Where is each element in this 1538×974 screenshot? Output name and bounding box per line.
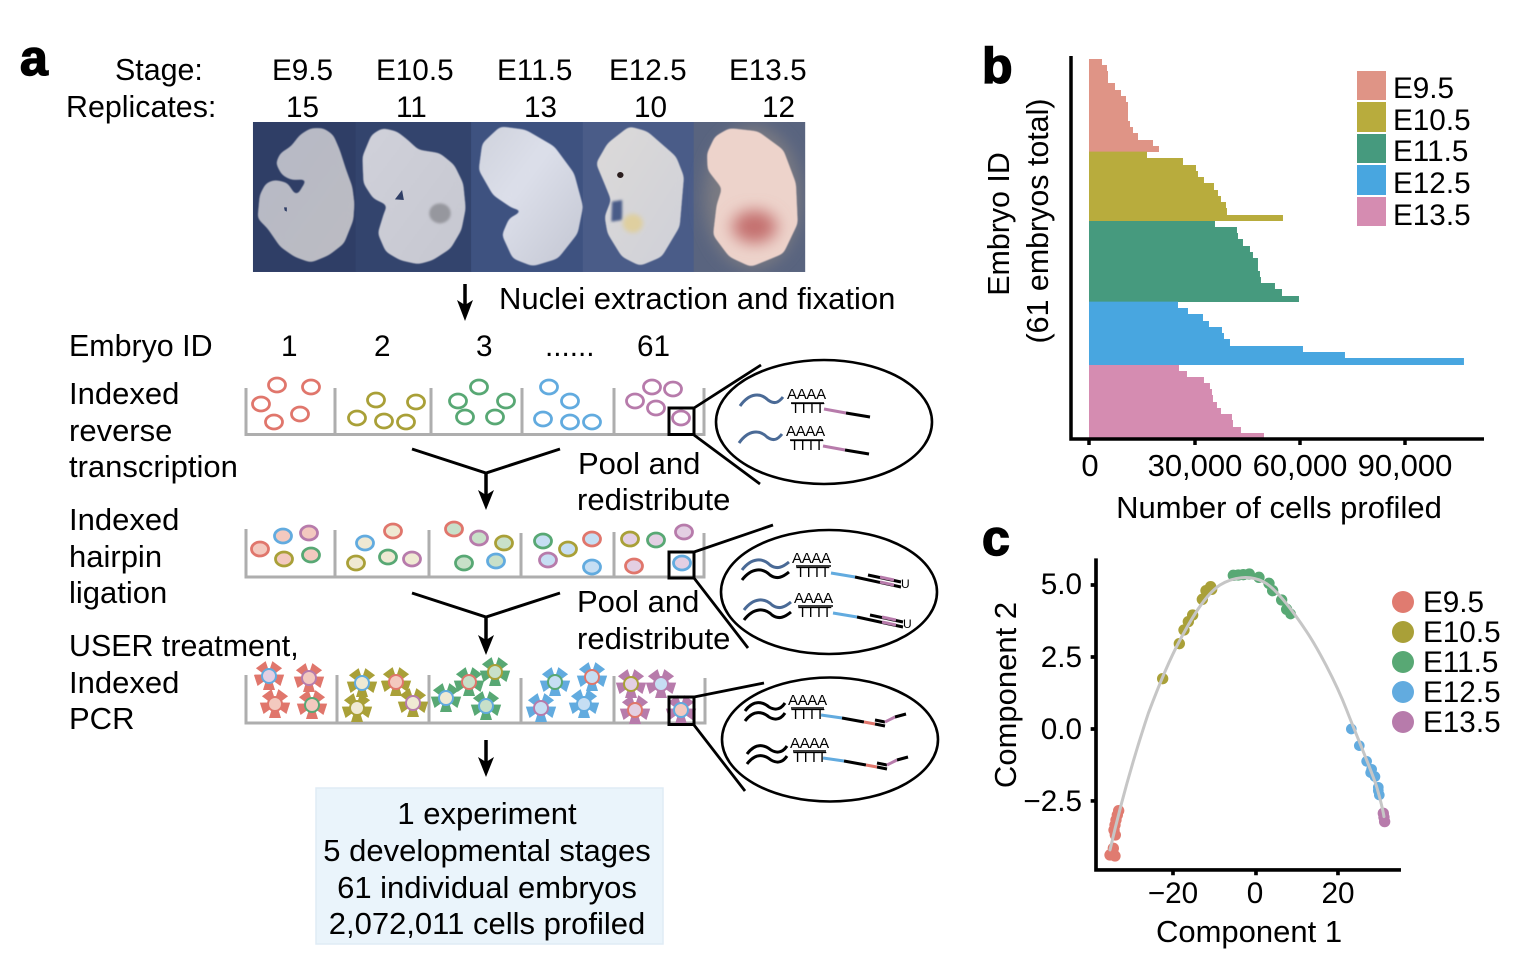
- panel c x-axis title: Component 1: [1156, 914, 1342, 949]
- step label: USER treatment, indexed PCR: Indexed: [69, 665, 179, 700]
- step label: indexed reverse transcription: reverse: [69, 413, 172, 448]
- callout: reverse transcription zoom: AAAA: [787, 386, 826, 403]
- plate: USER treatment PCR wells: [246, 657, 705, 724]
- panel b legend: [1357, 71, 1471, 232]
- panel c y tick labels: [1023, 568, 1082, 818]
- step label: USER treatment, indexed PCR: PCR: [69, 701, 134, 736]
- summary box: 2,072,011 cells profiled: [329, 906, 645, 941]
- points: E11.5: [1228, 568, 1296, 619]
- arrow: to summary: [478, 740, 494, 777]
- panel b legend: E9.5: [1393, 72, 1454, 105]
- panel b x tick labels: 30,000: [1148, 448, 1242, 483]
- replicates row: 10: [634, 91, 667, 124]
- callout: hairpin ligation zoom: TTTT: [798, 604, 831, 621]
- label: pool and redistribute 2: [577, 584, 730, 656]
- histogram bars: [1089, 59, 1464, 438]
- panel b x tick labels: 90,000: [1358, 448, 1452, 483]
- callout: hairpin ligation zoom: AAAA: [792, 550, 831, 567]
- stage row: E13.5: [729, 54, 807, 87]
- panel b x tick labels: 0: [1081, 448, 1099, 483]
- panel c x tick labels: 20: [1321, 877, 1355, 910]
- callout: PCR zoom: TTTT: [793, 749, 826, 766]
- panel c legend: E9.5: [1423, 586, 1484, 619]
- stage row: E12.5: [609, 54, 687, 87]
- step label: indexed hairpin ligation: [69, 502, 179, 610]
- label: pool and redistribute 2: redistribute: [577, 621, 730, 656]
- arrow: pool 1: [412, 449, 560, 510]
- replicates row: 13: [524, 91, 557, 124]
- callout: hairpin ligation zoom: TTTT: [796, 564, 829, 581]
- stage row: Stage:: [115, 53, 203, 87]
- replicates row: [66, 90, 795, 124]
- bars: E11.5: [1089, 221, 1299, 302]
- embryo ID row: 1: [281, 330, 298, 363]
- panel label b: b: [982, 38, 1013, 94]
- panel b legend: E13.5: [1393, 199, 1471, 232]
- panel c x tick labels: [1148, 877, 1355, 910]
- panel b x-axis title: Number of cells profiled: [1116, 490, 1442, 525]
- step label: indexed reverse transcription: [69, 376, 238, 484]
- summary box: 1 experiment: [397, 796, 577, 831]
- embryo ID row: [69, 329, 670, 363]
- plate: reverse transcription wells: [246, 378, 704, 434]
- callout: reverse transcription zoom: TTTT: [790, 437, 823, 454]
- embryo ID row: ......: [545, 330, 594, 363]
- arrow: nuclei extraction: [457, 284, 473, 321]
- plate: hairpin ligation wells: [246, 522, 704, 577]
- summary box: 61 individual embryos: [337, 870, 637, 905]
- points: E12.5: [1346, 724, 1385, 800]
- panel c legend: E12.5: [1423, 676, 1501, 709]
- label: pool and redistribute 2: Pool and: [577, 584, 699, 619]
- embryo ID row: 3: [476, 330, 493, 363]
- panel c y-axis title: Component 2: [988, 602, 1023, 788]
- panel b x tick labels: [1081, 448, 1452, 483]
- bars: E13.5: [1089, 365, 1264, 438]
- callout: reverse transcription zoom: TTTT: [791, 400, 824, 417]
- callout: reverse transcription zoom: [669, 360, 932, 484]
- step label: USER treatment, indexed PCR: [69, 629, 299, 736]
- panel c y tick labels: −2.5: [1023, 785, 1082, 818]
- bars: E12.5: [1089, 302, 1464, 365]
- step label: USER treatment, indexed PCR: USER treatment,: [69, 629, 299, 663]
- panel c legend: [1392, 586, 1501, 739]
- step label: nuclei extraction: Nuclei extraction and fixation: [499, 281, 895, 316]
- panel c legend: E10.5: [1423, 616, 1501, 649]
- panel c x tick labels: 0: [1247, 877, 1263, 910]
- callout: PCR zoom: [669, 678, 938, 802]
- panel b y-axis title: (61 embryos total): [1021, 99, 1055, 343]
- bars: E10.5: [1089, 152, 1283, 221]
- replicates row: Replicates:: [66, 90, 216, 124]
- callout: hairpin ligation zoom: [669, 525, 937, 654]
- panel b legend: E12.5: [1393, 167, 1471, 200]
- panel c legend: E13.5: [1423, 706, 1501, 739]
- stage row: E9.5: [272, 54, 333, 87]
- label: pool and redistribute 1: [577, 446, 730, 517]
- panel c legend: E11.5: [1423, 646, 1498, 679]
- embryo photo strip: [253, 122, 805, 272]
- summary box: 5 developmental stages: [323, 833, 651, 868]
- label: pool and redistribute 1: Pool and: [578, 446, 700, 481]
- panel b legend: E10.5: [1393, 104, 1471, 137]
- panel b y-axis title: [982, 99, 1055, 343]
- panel c y tick labels: 0.0: [1041, 713, 1082, 746]
- step label: indexed reverse transcription: transcription: [69, 449, 238, 484]
- callout: PCR zoom: AAAA: [790, 735, 829, 752]
- panel c x tick labels: −20: [1148, 877, 1198, 910]
- embryo ID row: Embryo ID: [69, 329, 213, 363]
- panel c y tick labels: 2.5: [1041, 641, 1082, 674]
- panel label a: a: [20, 30, 49, 86]
- summary box: [316, 788, 663, 944]
- panel c y tick labels: 5.0: [1041, 568, 1082, 601]
- callout: hairpin ligation zoom: AAAA: [794, 590, 833, 607]
- panel b x tick labels: 60,000: [1253, 448, 1347, 483]
- callout: hairpin ligation zoom: U: [901, 577, 910, 591]
- bars: E9.5: [1089, 59, 1159, 152]
- stage row: E11.5: [497, 54, 572, 87]
- panel label c: c: [982, 510, 1010, 566]
- embryo ID row: 61: [637, 330, 670, 363]
- callout: PCR zoom: TTTT: [791, 706, 824, 723]
- callout: reverse transcription zoom: AAAA: [786, 423, 825, 440]
- panel b axes: [1071, 56, 1484, 445]
- trajectory scatter: [1091, 558, 1401, 875]
- panel b legend: E11.5: [1393, 135, 1468, 168]
- stage row: E10.5: [376, 54, 454, 87]
- callout: hairpin ligation zoom: U: [903, 617, 912, 631]
- stage row: [115, 53, 807, 87]
- replicates row: 11: [396, 91, 427, 124]
- points: E9.5: [1104, 805, 1124, 862]
- arrow: pool 2: [412, 593, 560, 655]
- panel b y-axis title: Embryo ID: [982, 152, 1016, 296]
- step label: indexed hairpin ligation: Indexed: [69, 502, 179, 537]
- replicates row: 15: [286, 91, 319, 124]
- points: E10.5: [1157, 581, 1217, 684]
- label: pool and redistribute 1: redistribute: [577, 482, 730, 517]
- points: E13.5: [1378, 808, 1390, 827]
- callout: PCR zoom: AAAA: [788, 692, 827, 709]
- step label: indexed hairpin ligation: ligation: [69, 575, 167, 610]
- embryo ID row: 2: [374, 330, 391, 363]
- step label: indexed reverse transcription: Indexed: [69, 376, 179, 411]
- replicates row: 12: [762, 91, 795, 124]
- principal curve: [1110, 578, 1384, 850]
- step label: indexed hairpin ligation: hairpin: [69, 539, 162, 574]
